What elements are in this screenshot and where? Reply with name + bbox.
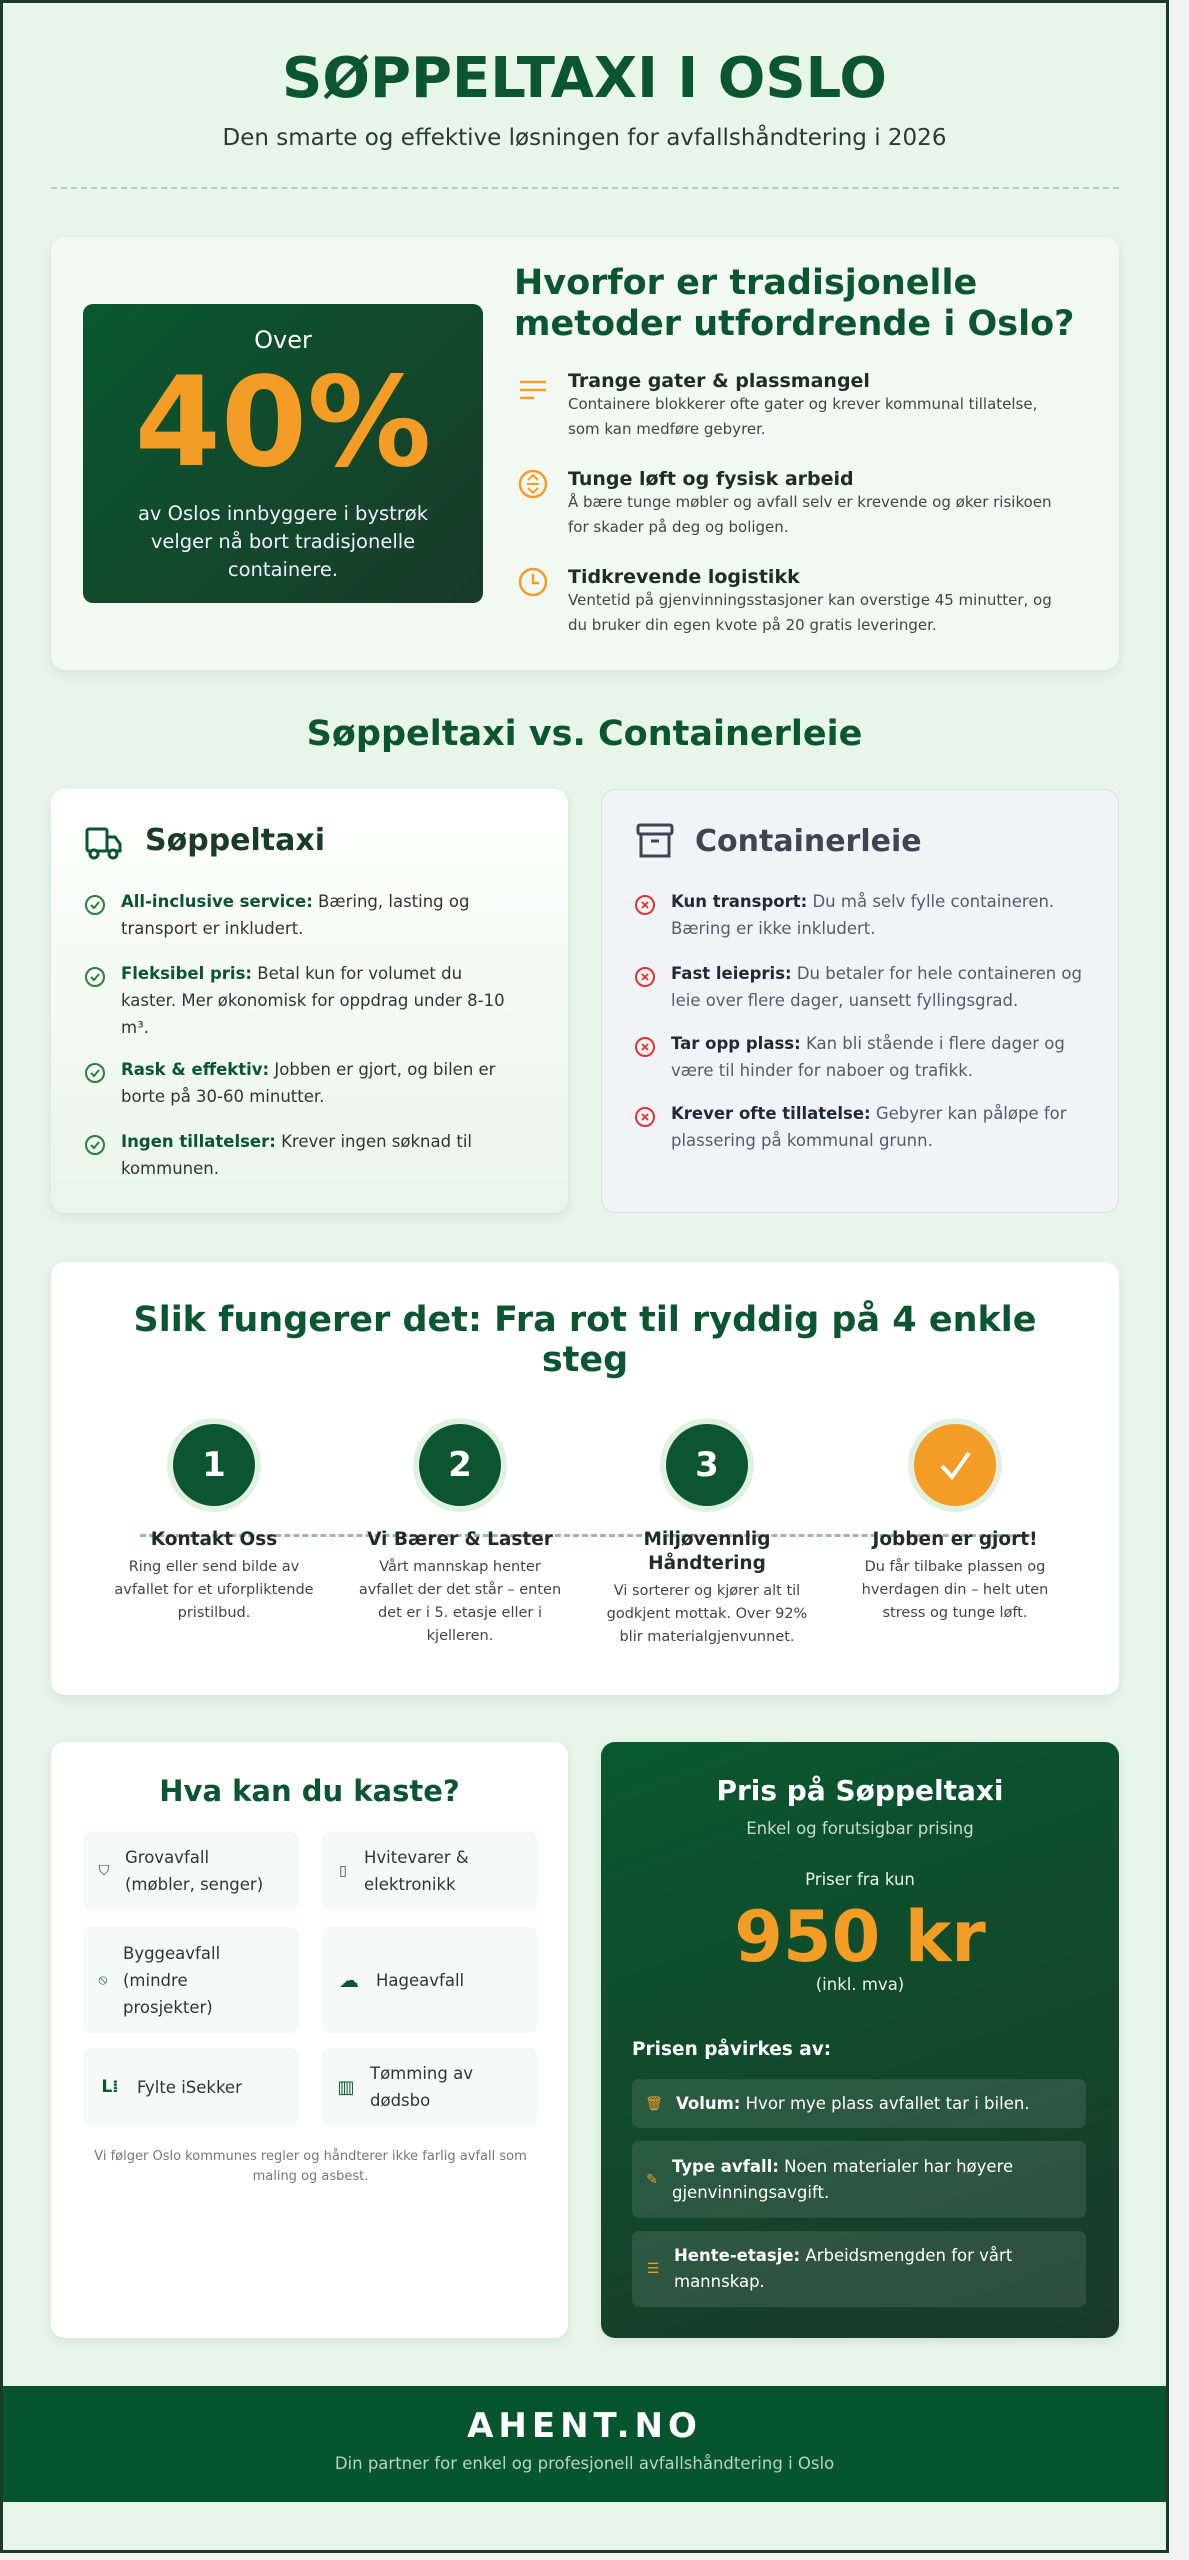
step text 1 bbox=[114, 1529, 314, 1621]
list: containerleie cons: Krever ofte tillatelse: Gebyrer kan påløpe for plassering på kommunal grunn. bbox=[671, 1104, 1067, 1150]
step text 3: Miljøvennlig Håndtering bbox=[643, 1529, 771, 1574]
heading: steps: steg bbox=[542, 1340, 628, 1380]
tile grid: Tømming av bbox=[370, 2064, 473, 2083]
tile grid: ⛉ bbox=[99, 1862, 109, 1878]
panel: containerleie bbox=[601, 789, 1119, 1213]
item: trange gater: Trange gater & plassmangel bbox=[568, 370, 870, 392]
tile grid: ☁ bbox=[339, 1968, 359, 1992]
item: tidkrevende: du bruker din egen kvote på 20 gratis leveringer. bbox=[568, 616, 937, 634]
factor: etasje: Hente-etasje: Arbeidsmengden for vårt mannskap. bbox=[674, 2246, 1012, 2291]
step text 4: Du får tilbake plassen og hverdagen din – helt uten stress og tunge løft. bbox=[862, 1559, 1048, 1621]
tile grid: L⁞ bbox=[101, 2076, 119, 2096]
step text 4 bbox=[862, 1529, 1048, 1621]
panel: steps bbox=[51, 1262, 1119, 1695]
list: søppeltaxi pros: Rask & effektiv: Jobben er gjort, og bilen er borte på 30-60 minutter. bbox=[121, 1060, 495, 1106]
panel: søppeltaxi bbox=[51, 789, 568, 1213]
factor: type: Type avfall: Noen materialer har høyere gjenvinningsavgift. bbox=[672, 2156, 1013, 2202]
icon: clock bbox=[518, 568, 548, 596]
panel: price: Priser fra kun bbox=[805, 1870, 915, 1889]
price value: 950 kr bbox=[734, 1896, 986, 1978]
item: tidkrevende bbox=[518, 566, 1052, 634]
panel: what to throw bbox=[51, 1742, 568, 2338]
step 2: 2 bbox=[448, 1445, 472, 1485]
icon: lines bbox=[520, 380, 546, 400]
list: containerleie cons: Tar opp plass: Kan bli stående i flere dager og være til hinder for naboer og trafikk. bbox=[671, 1034, 1065, 1080]
stat box: 40%: containere. bbox=[228, 558, 338, 581]
title: SØPPELTAXI I OSLO bbox=[282, 46, 887, 111]
footer: Din partner for enkel og profesjonell avfallshåndtering i Oslo bbox=[335, 2454, 834, 2473]
item: tunge løft: Å bære tunge møbler og avfall selv er krevende og øker risikoen bbox=[568, 493, 1052, 511]
price sub: Enkel og forutsigbar prising bbox=[746, 1819, 974, 1838]
item: tunge løft: for skader på deg og boligen. bbox=[568, 518, 789, 536]
tile grid: ▯ bbox=[339, 1862, 347, 1878]
stat box: 40%: av Oslos innbyggere i bystrøk bbox=[138, 502, 428, 525]
list: containerleie cons: Kun transport: Du må selv fylle containeren. Bæring er ikke inkludert. bbox=[671, 892, 1054, 938]
subtitle: Den smarte og effektive løsningen for avfallshåndtering i 2026 bbox=[223, 125, 946, 151]
footnote: Vi følger Oslo kommunes regler og håndterer ikke farlig avfall som maling og asbest. bbox=[94, 2149, 527, 2184]
tile grid: prosjekter) bbox=[123, 1998, 213, 2016]
factors heading: Prisen påvirkes av: bbox=[632, 2039, 831, 2060]
heading: Hva kan du kaste? bbox=[159, 1774, 460, 1808]
step text 3: Vi sorterer og kjører alt til godkjent mottak. Over 92% blir materialgjenvunnet. bbox=[607, 1583, 807, 1645]
item: tunge løft: Tunge løft og fysisk arbeid bbox=[568, 468, 854, 490]
factor: volum: 🗑 bbox=[645, 2096, 663, 2112]
heading: why bbox=[514, 263, 1074, 344]
icon: truck bbox=[86, 828, 122, 860]
tile grid: ⦸ bbox=[98, 1972, 108, 1988]
tile grid: (møbler, senger) bbox=[125, 1875, 263, 1894]
factor: type: ✎ bbox=[646, 2172, 658, 2188]
item: tunge løft bbox=[518, 468, 1052, 536]
footer bbox=[3, 2386, 1166, 2502]
item: tidkrevende: Tidkrevende logistikk bbox=[568, 566, 800, 588]
icon: arrows circle bbox=[518, 470, 548, 498]
list: søppeltaxi pros: Fleksibel pris: Betal kun for volumet du bbox=[121, 964, 462, 983]
factor: etasje: ☰ bbox=[647, 2261, 659, 2277]
panel: challenges bbox=[51, 237, 1119, 670]
tile grid: dødsbo bbox=[370, 2091, 430, 2110]
stat box: 40%: Over bbox=[254, 326, 312, 354]
tile grid: ▥ bbox=[337, 2076, 354, 2098]
step 2 bbox=[413, 1418, 507, 1512]
heading: vs: Søppeltaxi vs. Containerleie bbox=[307, 714, 862, 754]
list: søppeltaxi pros: Ingen tillatelser: Krever ingen søknad til kommunen. bbox=[121, 1132, 472, 1178]
step 3 bbox=[660, 1418, 754, 1512]
heading: steps: Slik fungerer det: Fra rot til ryddig på 4 enkle bbox=[133, 1300, 1036, 1340]
step 1: 1 bbox=[202, 1445, 226, 1485]
item: tidkrevende: Ventetid på gjenvinningsstasjoner kan overstige 45 minutter, og bbox=[568, 591, 1052, 609]
heading: why: metoder utfordrende i Oslo? bbox=[514, 304, 1074, 344]
icon: bin bbox=[636, 824, 674, 858]
step text 1: Ring eller send bilde av avfallet for et uforpliktende pristilbud. bbox=[114, 1559, 314, 1621]
tile grid: Fylte iSekker bbox=[137, 2078, 242, 2096]
step text 2: Vårt mannskap henter avfallet der det står – enten det er i 5. etasje eller i kjelleren. bbox=[359, 1559, 561, 1644]
step 3: 3 bbox=[695, 1445, 719, 1485]
stat box: 40%: 40% bbox=[135, 351, 431, 495]
list: søppeltaxi pros: kaster. Mer økonomisk for oppdrag under 8-10 m³. bbox=[121, 991, 505, 1037]
list: containerleie cons bbox=[635, 892, 1082, 1150]
tile grid: Byggeavfall bbox=[123, 1944, 220, 1962]
panel: price bbox=[601, 1742, 1119, 2338]
step text 4: Jobben er gjort! bbox=[872, 1529, 1038, 1550]
stat box: 40% bbox=[83, 304, 483, 603]
list: søppeltaxi pros bbox=[85, 892, 505, 1178]
step text 3 bbox=[607, 1529, 807, 1645]
list: søppeltaxi pros: All-inclusive service: Bæring, lasting og transport er inkludert. bbox=[121, 892, 469, 938]
header: Containerleie bbox=[695, 824, 922, 859]
step text 1: Kontakt Oss bbox=[151, 1529, 277, 1550]
tile grid: (mindre bbox=[123, 1970, 188, 1990]
factor: etasje bbox=[632, 2231, 1086, 2307]
list: containerleie cons: Fast leiepris: Du betaler for hele containeren og leie over flere dager, uansett fyllingsgrad. bbox=[671, 964, 1082, 1010]
price heading: Pris på Søppeltaxi bbox=[716, 1774, 1004, 1807]
heading: steps bbox=[133, 1300, 1036, 1380]
panel: price: (inkl. mva) bbox=[816, 1975, 904, 1994]
step 4: check bbox=[908, 1418, 1002, 1512]
tile grid: elektronikk bbox=[364, 1875, 456, 1894]
item: trange gater: Containere blokkerer ofte gater og krever kommunal tillatelse, bbox=[568, 395, 1037, 413]
factor: type bbox=[632, 2141, 1086, 2218]
step 1 bbox=[167, 1418, 261, 1512]
step text 2: Vi Bærer & Laster bbox=[367, 1529, 553, 1550]
heading: why: Hvorfor er tradisjonelle bbox=[514, 263, 977, 303]
stat box: 40%: velger nå bort tradisjonelle bbox=[151, 530, 415, 553]
tile grid bbox=[83, 1832, 538, 2126]
factor: volum bbox=[632, 2079, 1086, 2128]
header: Søppeltaxi bbox=[145, 823, 325, 858]
tile grid: Hageavfall bbox=[376, 1970, 464, 1990]
item: trange gater bbox=[520, 370, 1037, 438]
item: trange gater: som kan medføre gebyrer. bbox=[568, 420, 766, 438]
tile grid: Grovavfall bbox=[125, 1848, 209, 1867]
factor: volum: Volum: Hvor mye plass avfallet tar i bilen. bbox=[676, 2094, 1030, 2112]
footer: AHENT.NO bbox=[467, 2406, 702, 2446]
tile grid: Hvitevarer & bbox=[364, 1848, 469, 1867]
